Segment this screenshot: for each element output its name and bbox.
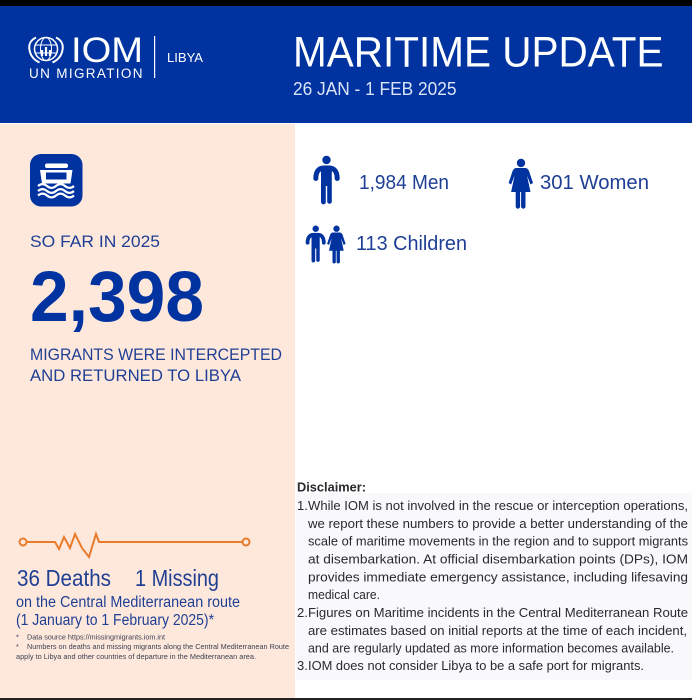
disclaimer heading: Disclaimer: [297, 480, 366, 494]
icon: pulse line [20, 534, 250, 557]
item 3: 3. [297, 658, 308, 673]
icon: woman [509, 159, 533, 209]
footnotes [16, 632, 289, 661]
IOM logo: UN MIGRATION [29, 66, 142, 81]
route caption: on the Central Mediterranean route [16, 594, 240, 611]
footnotes: Data source https://missingmigrants.iom.int [27, 632, 165, 642]
header band [0, 6, 692, 123]
deaths and missing: 36 Deaths [17, 565, 111, 591]
deaths and missing [17, 565, 219, 591]
footnotes: apply to Libya and other countries of departure in the Mediterranean area. [16, 652, 256, 661]
interception caption: MIGRANTS WERE INTERCEPTED [30, 345, 282, 364]
icon: children [308, 226, 346, 263]
title: MARITIME UPDATE [293, 28, 664, 76]
interception caption: AND RETURNED TO LIBYA [30, 366, 242, 385]
item 1: While IOM is not involved in the rescue or interception operations, [308, 498, 688, 513]
children count: 113 Children [356, 233, 467, 255]
so far label: SO FAR IN 2025 [30, 232, 160, 251]
item 2: and are regularly updated as more information becomes available. [308, 640, 674, 656]
men count: 1,984 Men [359, 172, 449, 194]
item 2: are estimates based on initial reports at the time of each incident, [308, 623, 687, 638]
icon: boat on waves [30, 154, 82, 206]
disclaimer [297, 480, 688, 673]
item 1 [297, 498, 688, 602]
IOM logo [29, 30, 203, 81]
icon: man [316, 156, 337, 204]
interception caption [30, 345, 282, 385]
item 1: 1. [297, 498, 308, 513]
footnotes: * [16, 632, 19, 642]
icon: globe [29, 38, 63, 62]
item 2 [297, 605, 688, 656]
item 1: provides immediate emergency assistance, including lifesaving [308, 569, 688, 584]
footnotes: Numbers on deaths and missing migrants along the Central Mediterranean Route [27, 642, 289, 651]
IOM logo: LIBYA [167, 50, 203, 65]
date range: 26 JAN - 1 FEB 2025 [293, 79, 456, 99]
IOM logo: IOM [71, 30, 143, 70]
item 1: at disembarkation. At official disembarkation points (DPs), IOM [308, 552, 688, 566]
route caption [16, 594, 240, 629]
item 1: scale of maritime movements in the region and to support migrants [308, 534, 688, 549]
panel: interceptions and deaths [0, 124, 295, 698]
deaths and missing: 1 Missing [135, 565, 219, 591]
item 1: we report these numbers to provide a better understanding of the [307, 516, 688, 531]
footnotes: * [16, 642, 19, 651]
panel: demographic breakdown [308, 156, 649, 263]
total figure: 2,398 [30, 258, 204, 337]
item 2: Figures on Maritime incidents in the Central Mediterranean Route [308, 605, 688, 620]
route caption: (1 January to 1 February 2025)* [16, 612, 214, 629]
item 1: medical care. [308, 587, 380, 602]
item 3: IOM does not consider Libya to be a safe port for migrants. [308, 658, 644, 673]
women count: 301 Women [540, 172, 649, 194]
item 2: 2. [297, 605, 308, 620]
